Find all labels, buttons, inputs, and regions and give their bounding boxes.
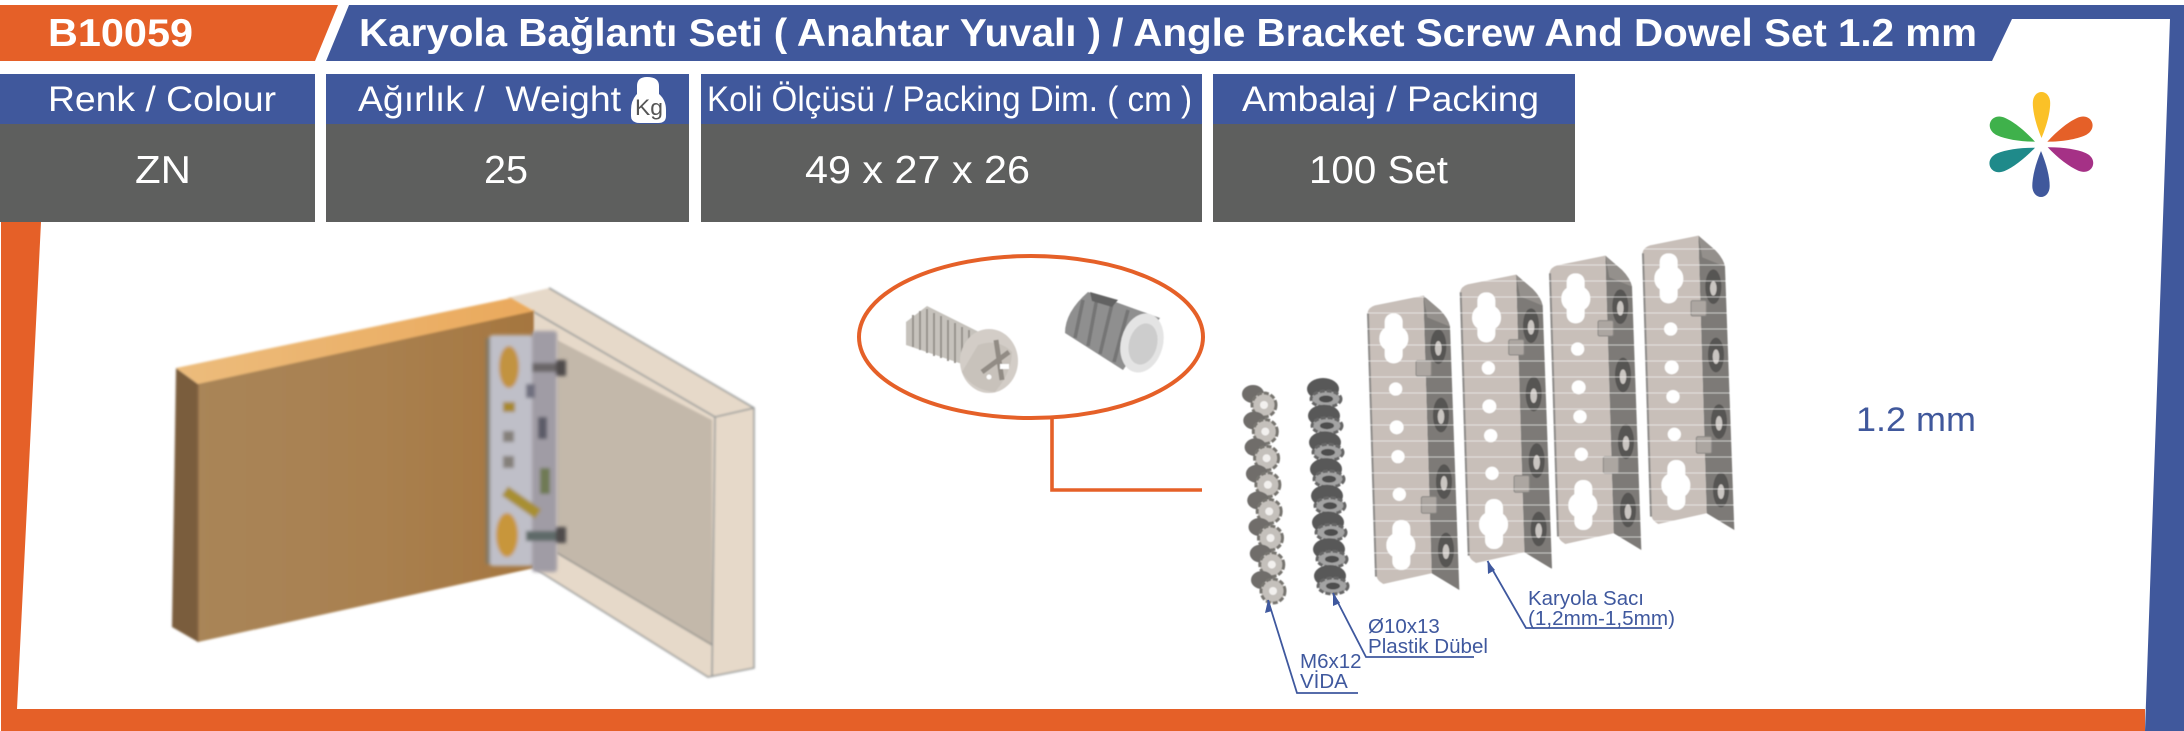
label: screw M6x12 with arrow: VİDA xyxy=(1300,670,1348,693)
spec column: colour: ZN xyxy=(135,149,191,192)
spec column: colour: Renk / Colour xyxy=(48,80,276,119)
logo: six coloured petals xyxy=(1986,92,2096,197)
spec column: packing xyxy=(1213,74,1575,222)
spec column: packing: Ambalaj / Packing xyxy=(1242,80,1539,119)
spec column: packing dimensions: 49 x 27 x 26 xyxy=(805,149,1030,192)
wood board xyxy=(172,298,534,642)
label: plastic dowel with arrow xyxy=(1333,593,1488,658)
icon: kg weight xyxy=(631,77,666,123)
label: screw M6x12 with arrow: M6x12 xyxy=(1300,650,1362,673)
product code tab: B10059 xyxy=(48,12,193,55)
spec column: packing: 100 Set xyxy=(1309,149,1448,192)
dowels column xyxy=(1307,378,1348,594)
label: bracket sheet with arrow: (1,2mm-1,5mm) xyxy=(1528,607,1675,630)
label: screw M6x12 with arrow xyxy=(1265,600,1362,693)
label: bracket sheet with arrow xyxy=(1488,561,1675,630)
illustration: assembled wooden corner joint xyxy=(172,288,754,677)
screws column xyxy=(1242,385,1285,603)
spec column: packing dimensions xyxy=(701,74,1202,222)
thickness label: 1.2 mm xyxy=(1856,401,1976,439)
frame: orange left and bottom border xyxy=(1,222,2145,731)
spec column: weight: Ağırlık / Weight xyxy=(358,80,621,119)
product code tab xyxy=(0,5,338,61)
label: plastic dowel with arrow: Ø10x13 xyxy=(1368,615,1440,638)
spec column: packing dimensions: Koli Ölçüsü / Packing Dim. ( cm ) xyxy=(707,80,1192,119)
spec column: weight xyxy=(326,74,689,222)
spec column: colour xyxy=(0,74,315,222)
close-up dowel xyxy=(1065,292,1170,377)
translucent side panel xyxy=(507,288,754,677)
callout: ellipse with screw and dowel close-up xyxy=(859,256,1203,490)
brackets: four angle brackets xyxy=(1367,236,1740,590)
spec column: weight: 25 xyxy=(484,149,528,192)
label: plastic dowel with arrow: Plastik Dübel xyxy=(1368,635,1488,658)
connector line xyxy=(1052,418,1202,490)
label: bracket sheet with arrow: Karyola Sacı xyxy=(1528,587,1644,610)
metal bracket fitted in joint xyxy=(486,331,566,572)
icon: kg weight: Kg xyxy=(635,95,663,120)
title: Karyola Bağlantı Seti ( Anahtar Yuvalı ) / Angle Bracket Screw And Dowel Set 1.2 mm xyxy=(359,12,1977,55)
close-up screw xyxy=(906,306,1018,393)
